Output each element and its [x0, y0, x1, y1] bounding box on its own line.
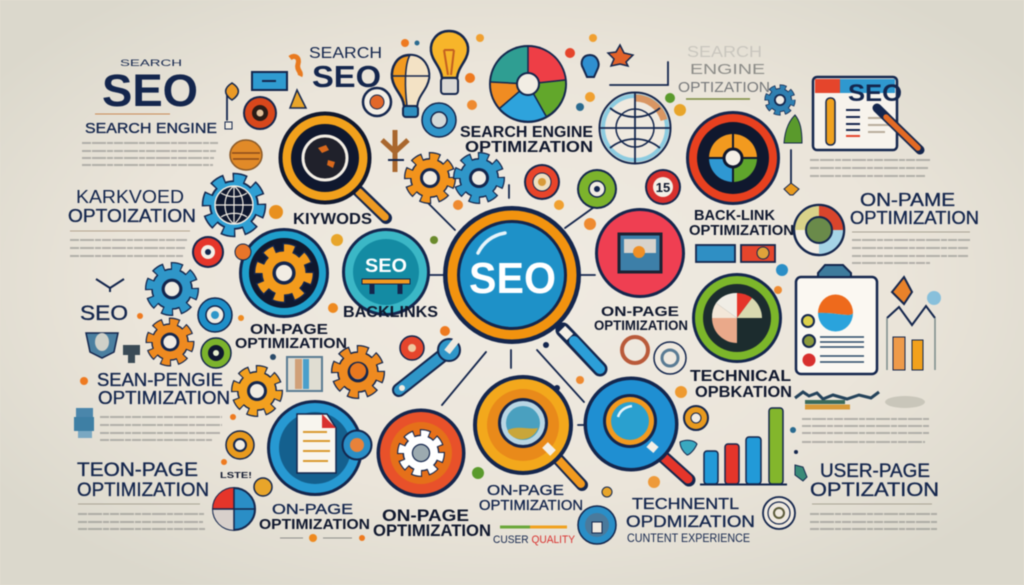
icon: SEO browser window — [813, 77, 920, 150]
text block: SEO search engine, top left — [82, 58, 218, 165]
icon: orange rings — [226, 431, 272, 496]
text block: keyword optimization: OPTOIZATION — [68, 206, 196, 226]
text block: user-page optimization: OPTIZATION — [810, 480, 939, 501]
text lines under the window — [810, 160, 930, 176]
text block: user-page optimization: USER-PAGE — [820, 461, 930, 482]
heading: on-page optimization, right of center — [594, 303, 688, 333]
icon: green eye badge — [577, 169, 617, 209]
icon: red blue quadrant circle — [213, 488, 255, 530]
icon: pin and bird — [784, 115, 802, 195]
label: keywords: KIYWODS — [293, 211, 372, 228]
heading: search engine optimization, faded: SEARCH — [687, 44, 762, 61]
icon: shield and puzzle — [86, 333, 140, 363]
heading: search engine optimization: SEARCH ENGINE — [460, 124, 593, 141]
icon: red circle with box — [595, 208, 685, 298]
icon: globe wheel — [600, 92, 670, 164]
icon: teal SEO badge: SEO — [365, 256, 407, 277]
text block: keyword optimization: KARKVOED — [76, 187, 184, 207]
heading: on-page optimization, bottom 2 — [373, 506, 491, 540]
chart: bar chart — [700, 408, 787, 484]
icon: lock badge — [578, 506, 616, 544]
icon: segmented wheel — [794, 205, 844, 255]
heading: search engine optimization — [460, 124, 593, 156]
icon: blue and green rings — [198, 298, 232, 368]
icon: clipboard report — [796, 265, 877, 374]
heading: on-page optimization, right of center: ON-PAGE — [601, 303, 679, 319]
icon: red ring small — [192, 236, 224, 268]
icon: yellow magnifier — [473, 375, 582, 485]
icon: concentric ring — [684, 406, 708, 430]
icon: small panels — [696, 245, 775, 262]
decorative dots — [137, 34, 798, 479]
icon: green pie ring — [692, 273, 782, 363]
text block: on-page optimization, bottom left: OPTIMIZATION — [77, 480, 209, 501]
connector lines — [227, 62, 791, 425]
heading: search engine optimization: OPTIMIZATION — [465, 139, 593, 156]
icon: orange coins — [235, 205, 283, 260]
text block: search-page optimization: SEAN-PENGIE — [97, 370, 223, 390]
heading: technical optimization, right: TECHNICAL — [690, 368, 791, 385]
icon: gears pair — [410, 158, 499, 198]
text block: on-page optimization, right: ON-PAME — [860, 190, 955, 210]
icon: blue magnifier — [584, 376, 689, 480]
icon: blue ring — [422, 103, 456, 137]
icon: document circle — [267, 400, 372, 496]
icon: red badge — [243, 96, 277, 130]
icon: magnifier, keywords — [278, 112, 386, 218]
heading: search SEO, top center-left: SEO — [312, 59, 381, 94]
icon: left gears — [151, 268, 193, 361]
icon: orange pin — [225, 83, 238, 129]
text block: on-page optimization, right: OPTIMIZATION — [850, 208, 979, 228]
text block: technical optimization, bottom: CUNTENT EXPERIENCE — [627, 531, 750, 545]
text block: on-page optimization, bottom left — [77, 460, 209, 529]
text block: search-page optimization: OPTIMIZATION — [98, 388, 230, 408]
icon: colorful strip — [795, 392, 925, 408]
heading: on-page optimization, left center — [235, 321, 347, 352]
heading: search engine optimization, faded: OPTIZATION — [678, 79, 770, 96]
icon: outline rings — [622, 337, 686, 374]
text block: SEO search engine, top left: SEARCH ENGINE — [85, 120, 217, 137]
heading: search SEO, top center-left: SEARCH — [309, 45, 382, 62]
icon: blue tag — [252, 72, 287, 90]
icon: orange gears center left — [237, 351, 379, 411]
text block: keyword optimization — [68, 187, 196, 256]
heading: on-page optimization, bottom 2: OPTIMIZATION — [373, 521, 491, 540]
text block: SEO search engine, top left: SEO — [102, 65, 198, 116]
icon: orange cross tree — [382, 130, 408, 172]
icon: orange squiggle — [290, 56, 300, 76]
icon: orange coin — [230, 140, 262, 170]
heading: on-page optimization, bottom 3 — [479, 482, 583, 546]
text block: SEO search engine, top left: SEARCH — [120, 58, 182, 68]
label: SEO: SEO — [469, 254, 556, 303]
icon: blue gear with globe — [209, 180, 259, 230]
heading: on-page optimization, bottom 3: CUSER QUALITY — [493, 534, 576, 546]
heading: on-page optimization, right of center: OPTIMIZATION — [594, 317, 688, 333]
heading: on-page optimization, left center: OPTIMIZATION — [235, 335, 347, 352]
heading: on-page optimization, bottom 3: OPTIMIZATION — [479, 497, 583, 514]
heading: search engine optimization, faded — [678, 44, 770, 99]
text block: user-page optimization — [810, 461, 939, 529]
icon: green bird — [795, 465, 807, 481]
text block: on-page optimization, bottom left: TEON-PAGE — [77, 460, 198, 481]
icon: split light bulb — [392, 55, 429, 117]
chart: line and bars — [887, 306, 935, 370]
icon: target circle — [363, 88, 391, 116]
icon: red and black donut — [686, 111, 780, 205]
icon: central SEO magnifier — [443, 206, 600, 369]
text block: technical optimization, bottom: TECHNENTL — [632, 496, 739, 513]
icon: star and pin — [582, 45, 633, 77]
icon: SEO browser window: SEO — [848, 80, 902, 107]
heading: on-page optimization, bottom 1: ON-PAGE — [272, 501, 353, 518]
label: list: LSTE! — [220, 471, 252, 480]
icon: wrench — [399, 338, 460, 391]
heading: on-page optimization, bottom 1: OPTIMIZATION — [259, 516, 370, 533]
heading: on-page optimization, bottom 1 — [259, 501, 370, 542]
icon: small items — [602, 440, 697, 497]
icon: red target — [524, 164, 560, 200]
heading: technical optimization, right: OPBKATION — [695, 384, 792, 401]
icon: small red badge — [400, 336, 424, 360]
icon: number badge: 15 — [656, 180, 670, 195]
chart: coloured donut — [489, 45, 567, 123]
icon: yellow light bulb — [431, 31, 468, 94]
label: SEO left: SEO — [80, 302, 128, 325]
heading: back-link optimization — [689, 207, 794, 239]
icon: small bell — [290, 90, 306, 108]
icon: crossed sticks — [96, 279, 124, 292]
text block: on-page optimization, right — [850, 190, 979, 263]
icon: target rings — [763, 497, 795, 529]
text block: search-page optimization — [80, 370, 230, 440]
heading: on-page optimization, bottom 3: ON-PAGE — [487, 482, 564, 499]
heading: technical optimization, right — [690, 368, 792, 401]
heading: search SEO, top center-left — [309, 45, 382, 94]
icon: columns panel — [287, 357, 322, 391]
text block: technical optimization, bottom — [626, 496, 755, 545]
icon: number badge — [645, 169, 681, 205]
icon: printer — [74, 408, 94, 438]
icon: blue circle with gear — [239, 228, 329, 318]
icon: orange gear circle — [376, 408, 466, 498]
icon: diamond and blur — [892, 277, 941, 305]
heading: on-page optimization, left center: ON-PAGE — [250, 321, 328, 338]
heading: search engine optimization, faded: ENGINE — [690, 61, 765, 78]
icon: teal SEO badge — [342, 228, 430, 316]
heading: back-link optimization: BACK-LINK — [694, 207, 775, 224]
heading: back-link optimization: OPTIMIZATION — [689, 222, 794, 239]
icon: small gear blue — [768, 88, 792, 112]
heading: on-page optimization, bottom 2: ON-PAGE — [382, 506, 469, 525]
label: backlinks: BACKLINKS — [343, 304, 438, 321]
text lines, right — [802, 419, 930, 442]
text block: technical optimization, bottom: OPDMIZATION — [626, 512, 755, 531]
